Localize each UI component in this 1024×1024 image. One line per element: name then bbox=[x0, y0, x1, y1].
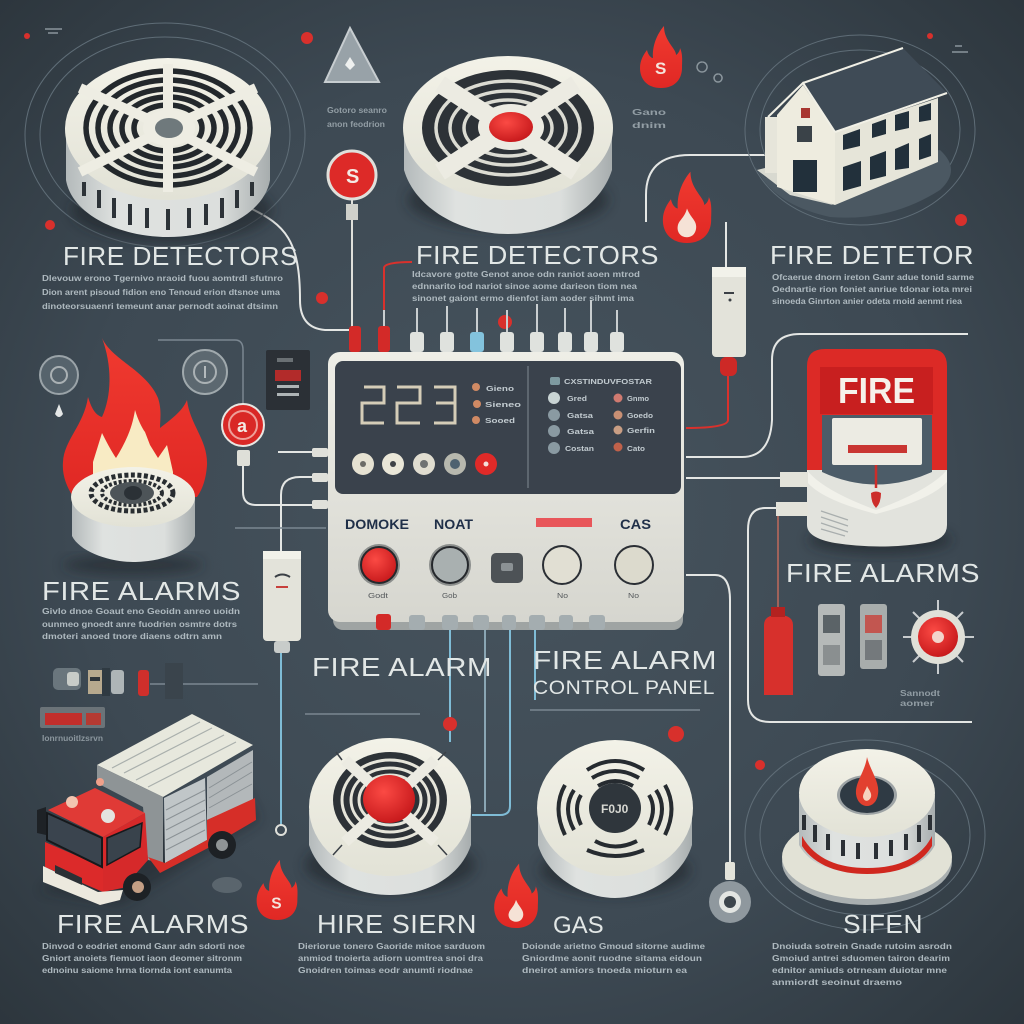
control panel bbox=[328, 352, 684, 630]
text block: right note: Sannodt bbox=[900, 688, 940, 698]
red extinguisher cylinder bbox=[764, 607, 793, 695]
control panel: No bbox=[628, 593, 639, 600]
heading: fire alarm control panel: FIRE ALARM bbox=[533, 645, 717, 675]
flame icon: bottom left: S bbox=[271, 895, 282, 912]
text block: siren: Dnoiuda sotrein Gnade rutoim asrodn bbox=[772, 941, 952, 951]
gauge icons left bbox=[40, 350, 227, 417]
text block: right note: aomer bbox=[900, 698, 935, 708]
text block: siren: anmiordt seoinut draemo bbox=[772, 977, 902, 987]
text block: fire detectors centre: Idcavore gotte Genot anoe odn raniot aoen mtrod bbox=[412, 269, 640, 279]
manual call point: FIRE: FIRE bbox=[838, 370, 915, 411]
flame icon: upper middle bbox=[663, 172, 711, 243]
control panel: Gieno bbox=[486, 384, 515, 393]
knobs row bbox=[352, 453, 497, 475]
detector: top centre with red button bbox=[403, 56, 613, 234]
status lights bbox=[472, 383, 481, 424]
house bbox=[754, 48, 951, 218]
red lower bbox=[148, 798, 256, 873]
control panel: NOAT bbox=[434, 516, 473, 532]
heading: gas: GAS bbox=[553, 912, 604, 939]
list on right of screen: Gerfin bbox=[627, 426, 656, 435]
manual call point: FIRE bbox=[776, 349, 952, 554]
wall device ring bbox=[709, 862, 751, 923]
list on right of screen: Gred bbox=[567, 394, 587, 403]
heading: fire alarm control panel bbox=[533, 645, 717, 699]
button labels: DOMOKE bbox=[345, 516, 409, 532]
control panel: Sooed bbox=[485, 416, 516, 425]
text block: hire siern: anmiod tnoierta adiorn uomtrea snoi dra bbox=[298, 953, 483, 963]
heading: fire alarms left: FIRE ALARMS bbox=[42, 576, 241, 606]
heading: fire alarm centre: FIRE ALARM bbox=[312, 652, 492, 682]
badge: red circle top: S bbox=[346, 166, 359, 188]
badge: lock icon red bbox=[222, 404, 264, 466]
text block: fire detectors left: Dlevouw erono Tgernivo nraoid fuou aomtrdl sfutnro bbox=[42, 273, 283, 283]
fire alarm flame on detector bbox=[63, 338, 207, 575]
flame icon: top: S bbox=[655, 59, 666, 78]
text block: gas: dneirot amiors tnoeda mioturn ea bbox=[522, 965, 687, 975]
text block: fire detector right: Oednartie rion foniet anriue tdonar iota mrei bbox=[772, 284, 972, 294]
detector: top left bbox=[65, 58, 272, 242]
siren device: bottom right bbox=[782, 749, 952, 905]
fire truck bbox=[37, 714, 260, 905]
heading: fire alarms bottom: FIRE ALARMS bbox=[57, 909, 249, 939]
text block: siren: Gmoiud antrei sduomen tairon dearim bbox=[772, 953, 951, 963]
small device box top-left panel bbox=[266, 350, 310, 410]
control panel: Gob bbox=[442, 593, 457, 600]
small decorative marks top bbox=[45, 29, 968, 82]
control panel: Godt bbox=[368, 593, 388, 600]
text block: right note bbox=[900, 688, 940, 708]
text block: fire detector right: sinoeda Ginrton anier odeta rnoid aenmt riea bbox=[772, 296, 962, 306]
list on right of screen: CXSTINDUVFOSTAR bbox=[564, 377, 653, 386]
text block: fire alarms bottom: Gniort anoiets fiemuot iaon deomer sitronm bbox=[42, 953, 242, 963]
inline switch: left lower bbox=[263, 551, 301, 835]
heading: fire detectors left: FIRE DETECTORS bbox=[63, 241, 298, 271]
text block: fire detector right bbox=[772, 272, 974, 306]
cable connectors top of panel bbox=[349, 300, 624, 352]
inline switch: right upper bbox=[712, 267, 746, 376]
text block: gas: Gniordme aonit ruodne sitama eidoun bbox=[522, 953, 702, 963]
list on right of screen: Goedo bbox=[627, 411, 653, 420]
box grey left side bbox=[97, 765, 163, 863]
siren detector with red dome bbox=[305, 738, 475, 895]
list on right of screen: Cato bbox=[627, 444, 645, 453]
control panel: CAS bbox=[620, 516, 651, 532]
text block: fire alarms bottom bbox=[42, 941, 245, 975]
text block: fire detectors left: dinoteorsuaenri temeunt anar pernodt aoinat dtsimn bbox=[42, 301, 278, 311]
heading: fire detectors centre: FIRE DETECTORS bbox=[416, 240, 659, 270]
list on right of screen: Costan bbox=[565, 444, 594, 453]
display screen bbox=[335, 361, 681, 494]
text block: fire detectors left: Dion arent pisoud fidion eno Tenoud erion dtsnoe uma bbox=[42, 287, 280, 297]
text block: gas bbox=[522, 941, 705, 975]
red alarm button with rays bbox=[903, 600, 974, 674]
text block: hire siern: Dieriorue tonero Gaoride mitoe sarduom bbox=[298, 941, 486, 951]
gas detector: F0J0 bbox=[601, 802, 629, 816]
text block: small notes top: Gotoro seanro bbox=[327, 105, 387, 115]
text block: small notes top: anon feodrion bbox=[327, 119, 385, 129]
control panel: Sieneo bbox=[485, 400, 522, 409]
heading: hire siern: HIRE SIERN bbox=[317, 909, 477, 939]
list on right of screen: Gatsa bbox=[567, 411, 594, 420]
text block: fire alarms bottom: ednoinu saiome hrna tiornda iont eanumta bbox=[42, 965, 232, 975]
heading: fire alarms right: FIRE ALARMS bbox=[786, 558, 980, 588]
text block: siren: ednitor amiuds otrneam duiotar mne bbox=[772, 965, 947, 975]
text block: fire detectors centre: ednnarito iod nariot sinoe aome darieon tiom nea bbox=[412, 281, 637, 291]
text block: fire alarms bottom: Dinvod o eodriet enomd Ganr adn sdorti noe bbox=[42, 941, 245, 951]
devices grey pair bbox=[818, 604, 887, 676]
flame icon: bottom left bbox=[257, 860, 298, 920]
badge: red circle top bbox=[328, 151, 376, 330]
text block: small notes top: dnim bbox=[632, 120, 667, 130]
digital readout bbox=[362, 387, 455, 423]
wire connectors left of panel bbox=[312, 448, 328, 509]
flame icon: top bbox=[640, 26, 682, 88]
control panel: No bbox=[557, 593, 568, 600]
text block: hire siern bbox=[298, 941, 486, 975]
text block: fire alarms left: ounmeo gnoedt anre fuodrien osmtre dotrs bbox=[42, 619, 237, 629]
heading: fire alarm control panel: CONTROL PANEL bbox=[533, 678, 715, 699]
red label strip bbox=[40, 707, 105, 743]
text block: siren bbox=[772, 941, 952, 987]
bottom connectors bbox=[376, 614, 391, 630]
text block: fire alarms left: Givlo dnoe Goaut eno Geoidn anreo uoidn bbox=[42, 606, 240, 616]
text block: fire alarms left bbox=[42, 606, 240, 641]
box top bbox=[97, 714, 253, 797]
text block: fire alarms left: dmoteri anoed tnore diaens odtrn amn bbox=[42, 631, 222, 641]
strip of switches bbox=[53, 663, 183, 699]
flame icon: bottom centre bbox=[494, 864, 538, 928]
text block: gas: Doionde arietno Gmoud sitorne audime bbox=[522, 941, 705, 951]
cab bbox=[103, 813, 148, 892]
list on right of screen: Gatsa bbox=[567, 427, 595, 436]
connecting wires bbox=[150, 155, 972, 870]
text block: small notes top: Gano bbox=[632, 107, 666, 117]
text block: fire detectors centre: sinonet gaiont ermo dienfot iam aoder sihmt ima bbox=[412, 293, 634, 303]
box panels bbox=[164, 778, 207, 863]
text block: small notes top bbox=[327, 105, 667, 130]
small red dots bbox=[24, 32, 967, 770]
list on right of screen: Gnmo bbox=[627, 394, 649, 403]
buttons bbox=[358, 544, 653, 586]
text block: fire detector right: Ofcaerue dnorn ireton Ganr adue tonid sarme bbox=[772, 272, 974, 282]
red label strip: Ionrnuoitlzsrvn bbox=[42, 733, 103, 743]
triangle warning icon bbox=[325, 28, 379, 82]
heading: fire detector right: FIRE DETETOR bbox=[770, 240, 974, 270]
text block: hire siern: Gnoidren toimas eodr anumti riodnae bbox=[298, 965, 473, 975]
list on right of screen bbox=[548, 377, 656, 454]
heading: siren: SIFEN bbox=[843, 909, 923, 939]
text block: fire detectors centre bbox=[412, 269, 640, 303]
gas detector bbox=[537, 740, 693, 898]
badge: lock icon red: a bbox=[237, 416, 248, 436]
text block: fire detectors left bbox=[42, 273, 283, 311]
